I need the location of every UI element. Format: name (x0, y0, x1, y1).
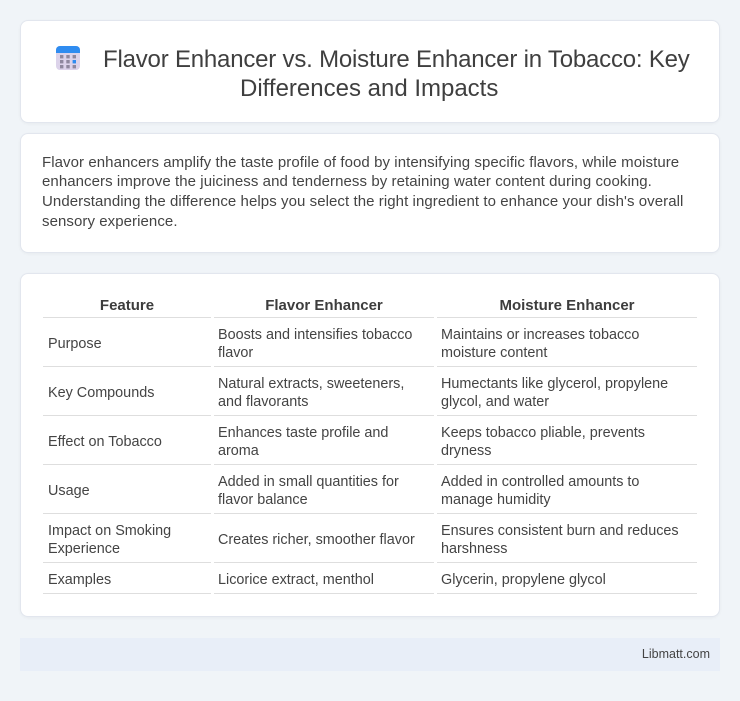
text: intro paragraph: enhancers improve the juiciness and tenderness by retaining water content during cooking. (42, 173, 652, 190)
text: intro paragraph: sensory experience. (42, 213, 178, 230)
text: intro paragraph: Flavor enhancers amplify the taste profile of food by intensifying specific flavors, while moisture (42, 154, 679, 171)
title: Differences and Impacts (240, 75, 498, 102)
table rows: flavor balance (218, 492, 308, 508)
table rows: and flavorants (218, 394, 308, 410)
table rows: Creates richer, smoother flavor (218, 532, 415, 548)
table rows: Humectants like glycerol, propylene (441, 376, 668, 392)
table rows: Enhances taste profile and (218, 425, 388, 441)
icon: calendar (56, 46, 80, 70)
table headings: Flavor Enhancer (265, 297, 383, 314)
panel: comparison table (20, 273, 720, 617)
table headings (100, 297, 635, 314)
table rows: manage humidity (441, 492, 551, 508)
table rows: harshness (441, 541, 507, 557)
table rows: Maintains or increases tobacco (441, 327, 639, 343)
text: intro paragraph (42, 154, 683, 230)
table rows: aroma (218, 443, 259, 459)
table rows: Keeps tobacco pliable, prevents (441, 425, 645, 441)
table rows: Natural extracts, sweeteners, (218, 376, 404, 392)
title (103, 46, 690, 102)
footer bar (20, 638, 720, 671)
table rows: Key Compounds (48, 385, 154, 401)
table rows: Added in controlled amounts to (441, 474, 639, 490)
footer text: Libmatt.com (642, 647, 710, 661)
panel: intro (20, 133, 720, 253)
text: intro paragraph: Understanding the difference helps you select the right ingredient to enhance your dish's overall (42, 193, 683, 210)
table rows: flavor (218, 345, 253, 361)
table rows: Added in small quantities for (218, 474, 399, 490)
table rows: Purpose (48, 336, 102, 352)
table rows: moisture content (441, 345, 547, 361)
table rows: Glycerin, propylene glycol (441, 572, 606, 588)
table rows: Examples (48, 572, 111, 588)
table rows: Experience (48, 541, 120, 557)
table rows: dryness (441, 443, 491, 459)
table rows: Impact on Smoking (48, 523, 171, 539)
title: Flavor Enhancer vs. Moisture Enhancer in Tobacco: Key (103, 46, 690, 73)
table rows: Effect on Tobacco (48, 434, 162, 450)
table rows: Boosts and intensifies tobacco (218, 327, 412, 343)
table headings: Feature (100, 297, 154, 314)
table rows: Usage (48, 483, 90, 499)
table rows: Licorice extract, menthol (218, 572, 374, 588)
panel: header (20, 20, 720, 123)
table headings: Moisture Enhancer (499, 297, 635, 314)
table rows: glycol, and water (441, 394, 549, 410)
table rows: Ensures consistent burn and reduces (441, 523, 679, 539)
table rows (43, 317, 697, 594)
